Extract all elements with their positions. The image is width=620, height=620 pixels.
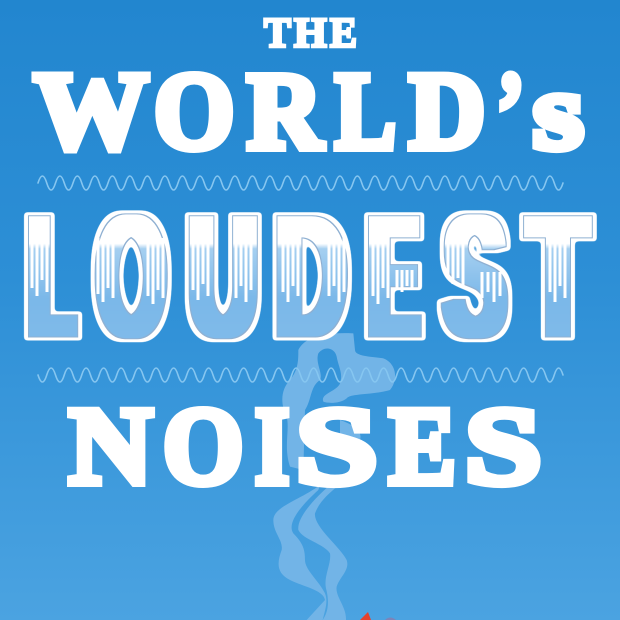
title word: NOISES: E (389, 385, 456, 507)
title word: NOISES: S (465, 385, 541, 507)
title word: LOUDEST: T (528, 181, 588, 374)
title word: LOUDEST: U (189, 181, 257, 374)
title word: LOUDEST: D (276, 181, 346, 374)
title word: THE: H (294, 11, 327, 57)
title word: NOISES: N (69, 385, 152, 507)
title word: WORLD's: O (154, 50, 234, 172)
title word: WORLD's (31, 50, 586, 172)
title word: NOISES: S (296, 385, 377, 507)
title word: LOUDEST: O (96, 181, 165, 374)
title word: NOISES: O (163, 385, 243, 507)
title word: THE: T (264, 11, 291, 57)
title word: LOUDEST: E (369, 181, 418, 374)
title word: WORLD's: L (335, 50, 396, 172)
title word: THE (263, 11, 357, 57)
title word: LOUDEST: L (29, 181, 74, 374)
title word: WORLD's: D (409, 50, 485, 172)
title word: WORLD's: R (247, 50, 322, 172)
title word: WORLD's: ’ (497, 50, 524, 172)
title word: NOISES: I (255, 385, 289, 507)
title word: WORLD's: s (533, 50, 584, 172)
title word: LOUDEST: S (444, 181, 506, 374)
title word: WORLD's: W (34, 50, 148, 172)
title word: THE: E (330, 11, 357, 57)
